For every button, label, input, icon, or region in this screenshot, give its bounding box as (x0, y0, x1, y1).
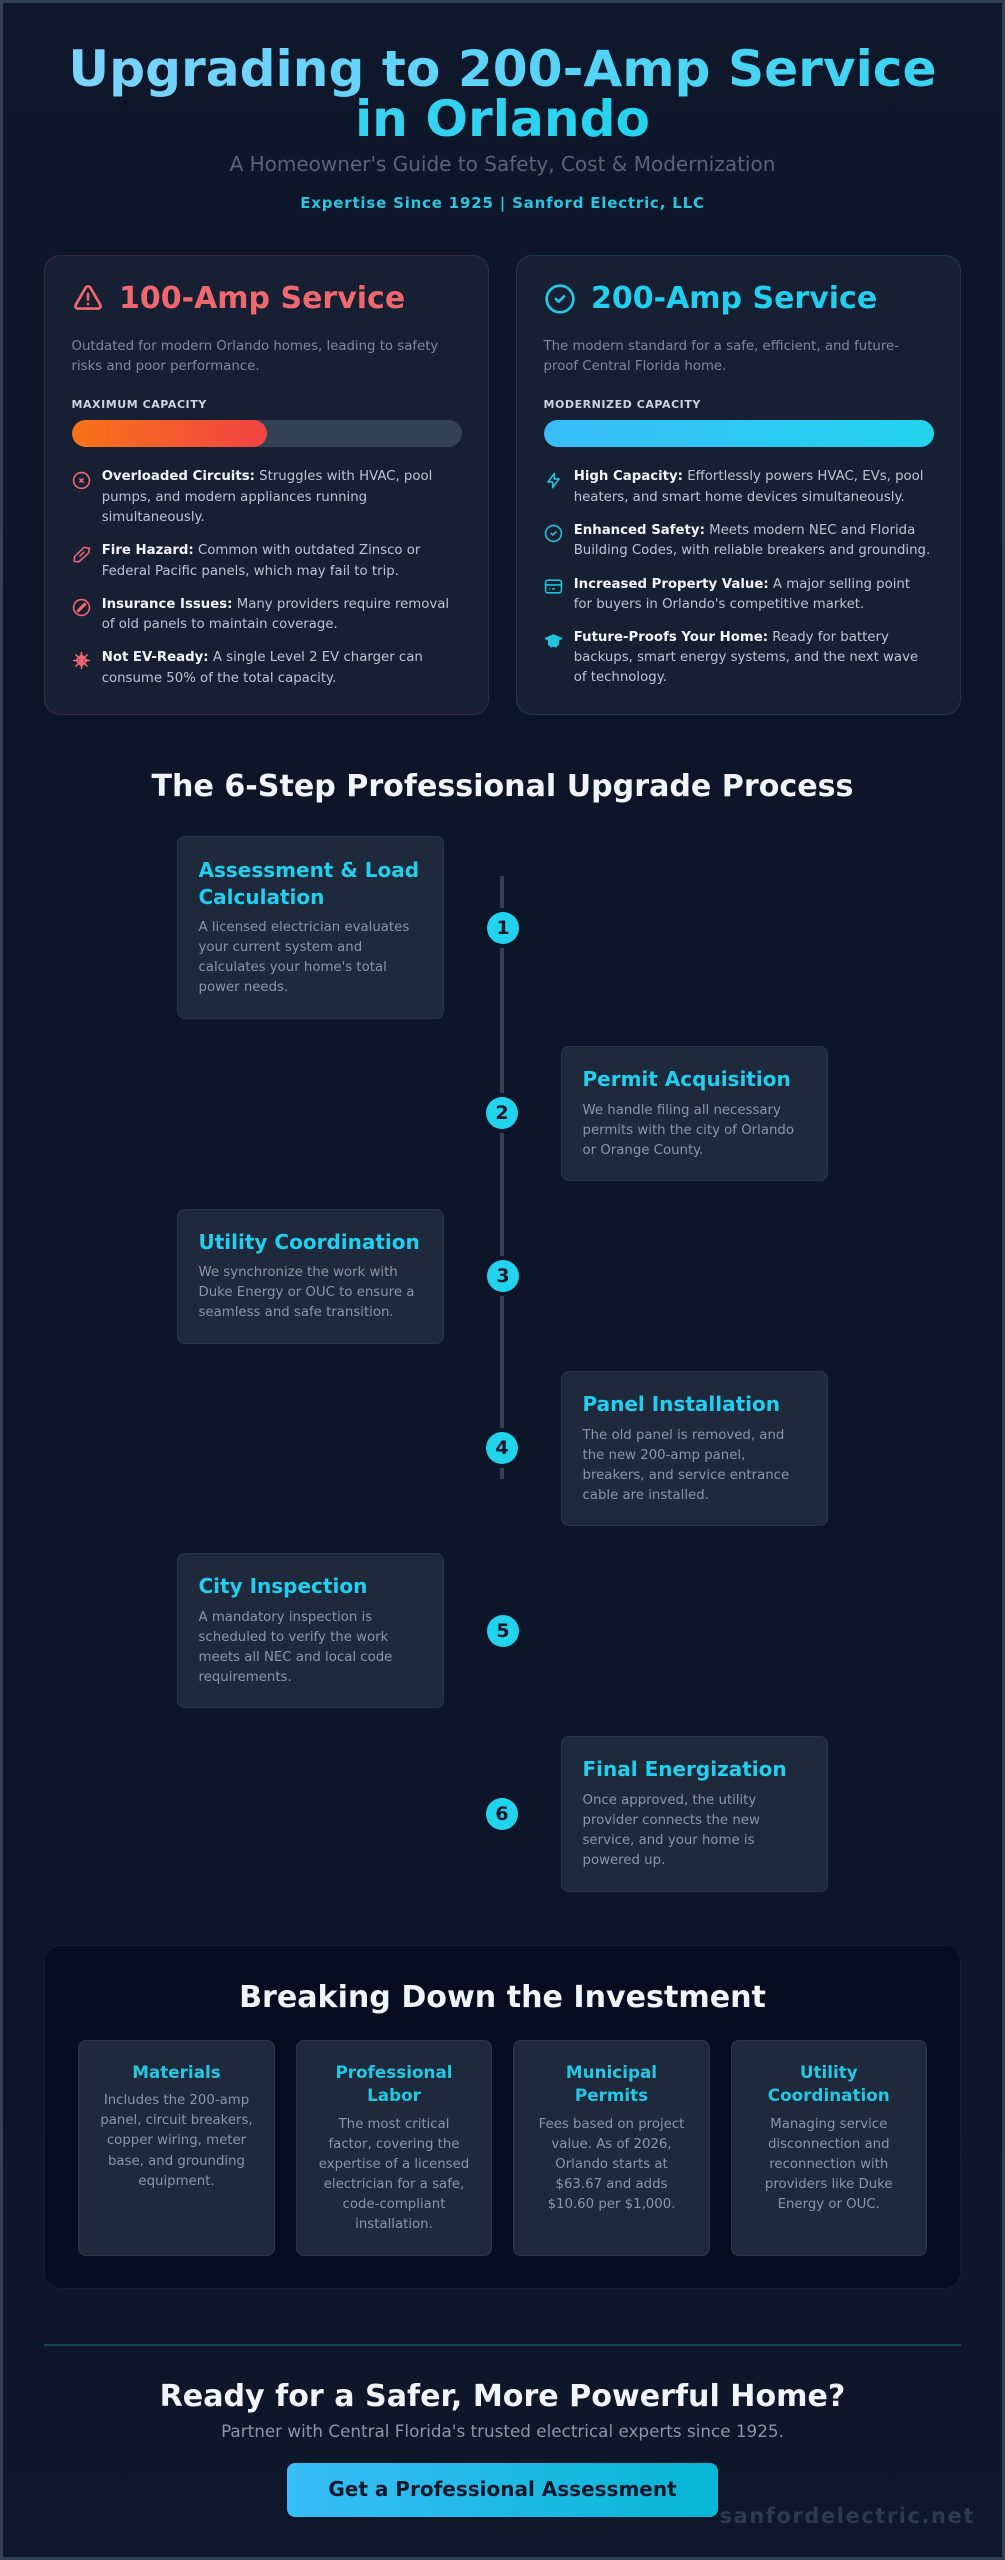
step 2 number (486, 1097, 518, 1129)
item: insurance issues (102, 597, 449, 632)
capacity label: MODERNIZED CAPACITY (544, 398, 701, 411)
icon: check circle small (544, 524, 562, 542)
step text: The old panel is removed, and (582, 1428, 784, 1442)
step 6 number: 6 (495, 1802, 509, 1824)
card text: Includes the 200-amp (104, 2093, 249, 2108)
heading: call to action: Ready for a Safer, More Powerful Home? (160, 2378, 845, 2414)
step text: your current system and (198, 940, 362, 955)
card text: installation. (355, 2217, 433, 2232)
card title: Utility (800, 2062, 858, 2082)
card text: equipment. (138, 2174, 215, 2189)
card: utility (730, 2040, 927, 2256)
item: future-proofs your home: of technology. (574, 670, 667, 685)
cta button: Get a Professional Assessment (328, 2477, 677, 2501)
card title: Materials (132, 2062, 221, 2082)
cta button (287, 2463, 718, 2517)
step text: A licensed electrician evaluates (198, 920, 409, 934)
card text (539, 2117, 684, 2212)
step text: Duke Energy or OUC to ensure a (198, 1285, 414, 1300)
step text (582, 1793, 760, 1868)
step text: breakers, and service entrance (582, 1468, 789, 1483)
step 4 number (486, 1432, 518, 1464)
step text: We handle filing all necessary (582, 1102, 781, 1118)
icon: ban (72, 598, 90, 616)
icon: tag (74, 546, 90, 562)
step 5 number (487, 1614, 519, 1646)
step text: We synchronize the work with (198, 1265, 398, 1280)
capacity label: MAXIMUM CAPACITY (72, 398, 207, 411)
step 4 card (561, 1370, 828, 1526)
item: fire hazard: Fire Hazard: Common with outdated Zinsco or (102, 543, 420, 558)
step 4 number: 4 (495, 1437, 509, 1459)
capacity bar (72, 420, 462, 447)
card title: Municipal (566, 2062, 657, 2082)
step 1 number (487, 912, 519, 944)
card title: Labor (367, 2085, 421, 2105)
step text: calculates your home's total (198, 960, 387, 975)
item: high capacity (574, 469, 924, 504)
timeline line (500, 876, 504, 1479)
description: risks and poor performance. (72, 359, 259, 374)
card title (335, 2062, 453, 2105)
step text: A mandatory inspection is (198, 1610, 372, 1625)
card text: code-compliant (343, 2197, 445, 2212)
card text: Fees based on project (539, 2117, 684, 2132)
step text (198, 1265, 414, 1320)
card text: disconnection and (768, 2137, 890, 2152)
item: fire hazard: Federal Pacific panels, which may fail to trip. (102, 564, 399, 578)
step 3 number (487, 1260, 519, 1292)
title: Upgrading to 200-Amp Service (68, 39, 937, 98)
card text: expertise of a licensed (319, 2157, 469, 2172)
step text: scheduled to verify the work (198, 1630, 388, 1645)
step 6 number (486, 1798, 518, 1830)
card text (319, 2117, 469, 2232)
step text: or Orange County. (582, 1143, 703, 1158)
step 1 number: 1 (496, 916, 510, 938)
step text: seamless and safe transition. (198, 1305, 394, 1320)
item: not ev-ready (102, 650, 423, 686)
item: insurance issues: Insurance Issues: Many providers require removal (102, 597, 449, 612)
cta subtext: Partner with Central Florida's trusted electrical experts since 1925. (221, 2421, 784, 2441)
step 5 number: 5 (496, 1620, 510, 1642)
step title: Assessment & Load (198, 858, 419, 882)
divider (44, 2344, 961, 2346)
title: in Orlando (355, 88, 650, 148)
card title: Permits (575, 2085, 648, 2105)
item: future-proofs your home: backups, smart energy systems, and the next wave (574, 650, 918, 665)
card text (100, 2093, 253, 2189)
card text (765, 2117, 893, 2212)
step 3 card (177, 1208, 444, 1344)
icon: bolt (547, 472, 560, 488)
step text: Once approved, the utility (582, 1793, 756, 1808)
heading: Breaking Down the Investment (239, 1980, 766, 2014)
step text: powered up. (582, 1853, 665, 1868)
watermark: sanfordelectric.net (720, 2504, 975, 2528)
card text: Orlando starts at (555, 2157, 668, 2172)
step title: Permit Acquisition (582, 1066, 791, 1090)
step text (198, 1610, 392, 1685)
description (543, 338, 899, 374)
card text: reconnection with (769, 2157, 888, 2172)
item: high capacity: High Capacity: Effortlessly powers HVAC, EVs, pool (574, 469, 924, 484)
step 6 card (561, 1736, 828, 1892)
item: overloaded circuits (102, 469, 432, 525)
capacity bar (544, 420, 934, 447)
card title (768, 2062, 890, 2105)
card text: The most critical (339, 2117, 449, 2132)
step text (198, 920, 409, 995)
card text: providers like Duke (765, 2177, 893, 2192)
tagline: Expertise Since 1925 | Sanford Electric, LLC (300, 194, 705, 212)
card text: panel, circuit breakers, (100, 2113, 253, 2128)
panel: 100-amp service (44, 255, 489, 715)
step 3 number: 3 (496, 1264, 510, 1286)
step title: City Inspection (198, 1574, 367, 1598)
heading: process: The 6-Step Professional Upgrade Process (152, 768, 853, 804)
card title: Professional (335, 2062, 453, 2082)
description (72, 338, 438, 374)
icon: check circle (545, 284, 575, 314)
description: Outdated for modern Orlando homes, leading to safety (72, 338, 438, 354)
item: future-proofs your home: Future-Proofs Your Home: Ready for battery (574, 630, 889, 645)
description: The modern standard for a safe, efficient, and future- (544, 338, 899, 354)
item: fire hazard (102, 543, 420, 578)
card text: base, and grounding (108, 2154, 245, 2169)
step text (582, 1428, 789, 1503)
item: not ev-ready: consume 50% of the total capacity. (102, 670, 336, 686)
panel: 200-amp service (516, 255, 961, 715)
step text: power needs. (198, 980, 288, 995)
icon: bug (72, 652, 90, 670)
item: enhanced safety: Enhanced Safety: Meets modern NEC and Florida (574, 523, 915, 538)
step title: Final Energization (582, 1757, 787, 1781)
icon: graduation cap (544, 634, 562, 648)
step 5 card (177, 1553, 444, 1708)
step text: meets all NEC and local code (198, 1650, 392, 1665)
step title: Calculation (198, 884, 324, 908)
step 2 number: 2 (495, 1102, 509, 1124)
item: increased property value: Increased Property Value: A major selling point (574, 577, 910, 592)
icon: warning triangle (74, 285, 102, 310)
card text: $10.60 per $1,000. (548, 2197, 675, 2212)
card text: Managing service (770, 2117, 887, 2132)
step text: the new 200-amp panel, (582, 1448, 745, 1463)
card title (566, 2062, 657, 2105)
item: enhanced safety (574, 523, 930, 558)
step text: requirements. (198, 1670, 292, 1685)
step text (582, 1102, 794, 1158)
item: future-proofs your home (574, 630, 918, 685)
heading: 100-Amp Service (119, 281, 405, 316)
step title: Utility Coordination (198, 1230, 420, 1254)
item: enhanced safety: Building Codes, with reliable breakers and grounding. (574, 543, 930, 558)
step title: Panel Installation (582, 1392, 780, 1416)
step title (198, 858, 419, 908)
step text: permits with the city of Orlando (582, 1123, 794, 1138)
step 1 card (177, 836, 444, 1018)
heading: 200-Amp Service (591, 281, 877, 316)
card text: $63.67 and adds (556, 2177, 667, 2192)
card text: factor, covering the (328, 2137, 459, 2152)
item: overloaded circuits: simultaneously. (102, 510, 205, 525)
step text: service, and your home is (582, 1833, 754, 1848)
card: labor (296, 2040, 492, 2256)
step text: cable are installed. (582, 1488, 709, 1503)
card text: copper wiring, meter (107, 2133, 246, 2148)
title (68, 39, 937, 148)
item: high capacity: heaters, and smart home devices simultaneously. (574, 490, 905, 504)
subtitle: A Homeowner's Guide to Safety, Cost & Modernization (230, 152, 775, 176)
step text: provider connects the new (582, 1813, 760, 1828)
card text: electrician for a safe, (324, 2177, 464, 2192)
card text: Energy or OUC. (778, 2197, 880, 2212)
description: proof Central Florida home. (544, 359, 726, 374)
item: insurance issues: of old panels to maintain coverage. (102, 617, 338, 632)
icon: credit card (544, 579, 562, 594)
icon: circle x (72, 472, 90, 490)
item: increased property value: for buyers in Orlando's competitive market. (574, 597, 864, 612)
panel: investment (44, 1945, 961, 2289)
item: not ev-ready: Not EV-Ready: A single Level 2 EV charger can (102, 650, 423, 665)
item: increased property value (574, 577, 910, 612)
card text: value. As of 2026, (551, 2137, 672, 2152)
item: overloaded circuits: pumps, and modern appliances running (102, 490, 367, 504)
card: materials (78, 2040, 275, 2256)
item: overloaded circuits: Overloaded Circuits: Struggles with HVAC, pool (102, 469, 432, 484)
step 2 card (561, 1046, 828, 1180)
card: permits (513, 2040, 710, 2256)
card title: Coordination (768, 2085, 890, 2105)
